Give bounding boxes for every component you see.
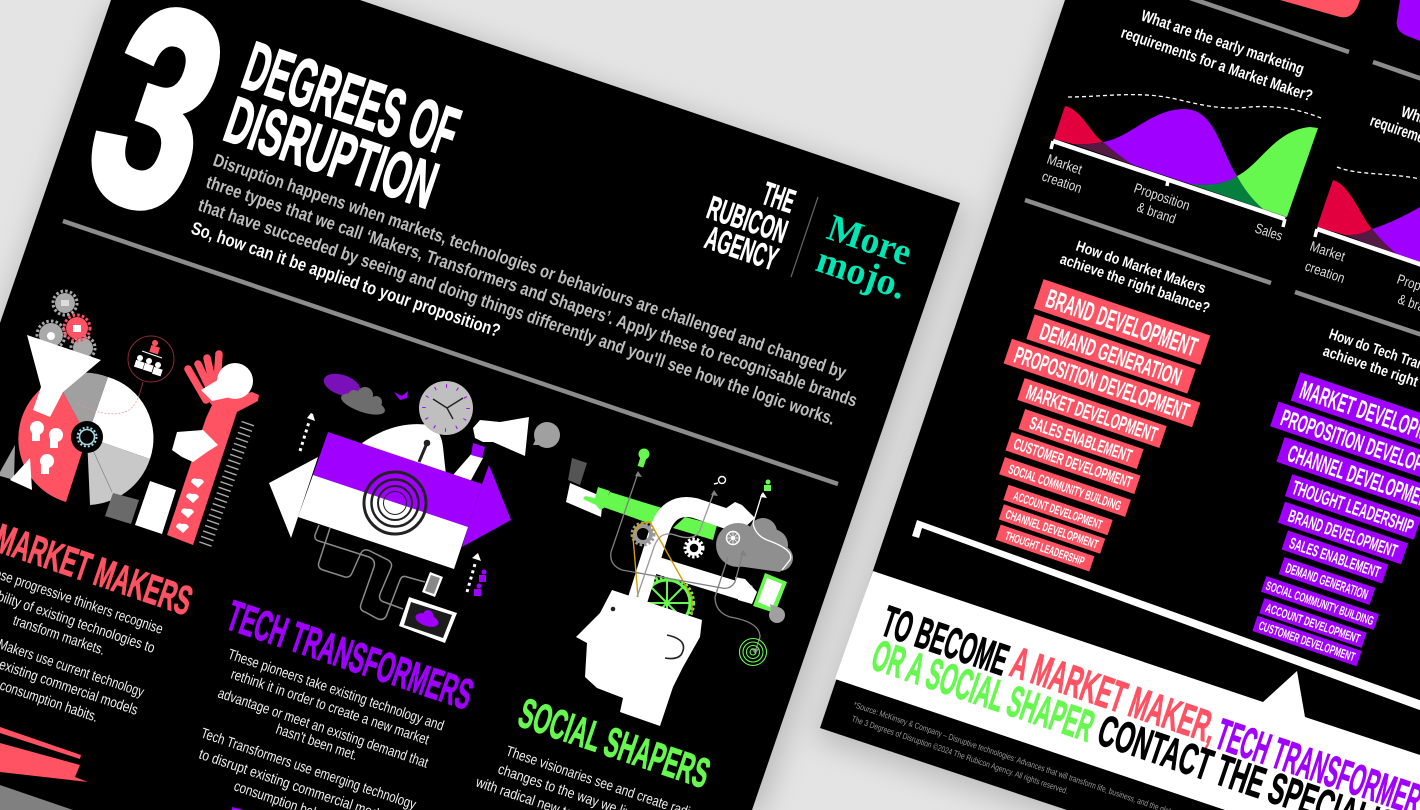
target xyxy=(740,638,766,666)
heading: market makers balance: achieve the right balance? xyxy=(1058,251,1212,317)
triangles xyxy=(0,445,32,490)
dotted arrows xyxy=(300,413,481,592)
text: tech transformers: rethink it in order to create a new market xyxy=(229,667,431,748)
heading: market makers balance: How do Market Makers xyxy=(1074,238,1208,297)
magnifier xyxy=(714,476,726,484)
eye and ear xyxy=(611,607,684,659)
purple mark at bottom xyxy=(232,807,244,810)
stack: market makers: BRAND DEVELOPMENT xyxy=(1042,283,1202,363)
white arch arm xyxy=(636,507,745,605)
text: market makers xyxy=(0,562,165,726)
stack: market makers: THOUGHT LEADERSHIP xyxy=(1003,529,1086,568)
intro text: Disruption happens when markets, technologies or behaviours are challenged and changed by xyxy=(211,150,849,383)
stack: market makers: CHANNEL DEVELOPMENT xyxy=(1004,507,1100,552)
heading: market maker requirements xyxy=(1119,8,1315,105)
stack: market makers: SALES ENABLEMENT xyxy=(1027,413,1135,466)
second chart labels: Market xyxy=(1308,238,1347,264)
bird xyxy=(394,391,408,400)
green arm xyxy=(583,487,717,540)
stack: market makers: DEMAND GENERATION xyxy=(1036,318,1185,391)
intro text: that have succeeded by seeing and doing things differently and you'll see how the logic works. xyxy=(196,195,838,429)
illustration: social shapers xyxy=(566,448,793,726)
illustration: market makers xyxy=(0,291,259,548)
stack: market makers: ACCOUNT DEVELOPMENT xyxy=(1012,489,1104,532)
connector arrows xyxy=(611,473,791,652)
stack: market makers: SOCIAL COMMUNITY BUILDING xyxy=(1007,461,1123,513)
presenter body xyxy=(362,424,446,480)
slogan: More mojo: More xyxy=(822,207,917,274)
heading: market maker requirements: What are the early marketing xyxy=(1139,8,1306,79)
stack: market makers: CUSTOMER DEVELOPMENT xyxy=(1011,436,1134,492)
second chart labels: creation xyxy=(1303,258,1347,286)
small icons xyxy=(638,448,771,491)
people icons xyxy=(474,570,486,596)
illustration: tech transformers xyxy=(269,369,560,643)
chart labels: Sales xyxy=(1253,220,1285,244)
panel: main infographic page xyxy=(0,0,960,810)
phone xyxy=(422,572,443,597)
belt xyxy=(633,522,692,615)
stack: market makers xyxy=(996,279,1210,571)
white lower arm xyxy=(656,565,750,594)
text: tech transformers: advantage or meet an existing demand that xyxy=(216,686,430,772)
top shapes xyxy=(1280,0,1420,41)
cloud grey xyxy=(339,387,387,419)
baseline bracket xyxy=(912,520,1420,712)
purple arrow xyxy=(462,465,511,547)
dark tab xyxy=(568,458,587,485)
white hand top xyxy=(722,502,755,530)
chart labels: & brand xyxy=(1135,199,1178,227)
divider xyxy=(63,221,838,484)
heading: market maker requirements: requirements for a Market Maker? xyxy=(1119,25,1315,105)
org chart icon xyxy=(128,336,174,396)
gears xyxy=(632,523,740,557)
illustration: bottom left arrows xyxy=(0,727,88,810)
white card xyxy=(566,483,603,517)
arrowheads xyxy=(635,471,767,654)
slogan: More mojo xyxy=(811,207,917,308)
head xyxy=(576,590,702,726)
panel: second page xyxy=(820,0,1420,810)
raised arm with bulb xyxy=(167,354,259,545)
stack: tech transformers: CUSTOMER DEVELOPMENT xyxy=(1257,619,1357,664)
slogan: More mojo: mojo. xyxy=(811,239,912,308)
cloud xyxy=(716,518,793,572)
CTA text: TO BECOME xyxy=(876,597,1015,685)
text: tech transformers: hasn't been met. xyxy=(274,722,359,764)
heading: tech transformers: TECH TRANSFORMERS xyxy=(221,592,479,720)
chart labels xyxy=(1040,151,1285,244)
clock xyxy=(419,381,473,435)
heading: market makers balance xyxy=(1058,238,1212,317)
chart labels: creation xyxy=(1040,168,1084,196)
title: DISRUPTION xyxy=(217,82,447,222)
speech bubble xyxy=(533,422,560,448)
second chart labels xyxy=(1303,238,1420,319)
text: tech transformers xyxy=(197,647,446,810)
pie chart xyxy=(18,373,153,505)
target rings xyxy=(364,472,426,534)
gears xyxy=(37,291,95,360)
title xyxy=(217,27,468,222)
CTA band xyxy=(835,571,1420,810)
logo: The Rubicon Agency: RUBICON xyxy=(703,189,792,250)
text: tech transformers: These pioneers take existing technology and xyxy=(226,647,446,735)
wires xyxy=(315,525,425,619)
cloud hatched xyxy=(321,369,363,401)
chart: market maker curves xyxy=(1051,95,1321,227)
green gear xyxy=(641,577,693,629)
intro text: So, how can it be applied to your proposition? xyxy=(189,218,503,341)
chart: tech transformer curves xyxy=(1315,167,1420,270)
speech bubble xyxy=(769,604,785,623)
chart labels: Proposition xyxy=(1132,180,1192,213)
banner xyxy=(313,432,482,527)
logo divider xyxy=(791,197,818,277)
logo: The Rubicon Agency xyxy=(701,175,800,277)
bar blocks xyxy=(105,481,176,534)
intro text: three types that we call ‘Makers, Transformers and Shapers’. Apply these to recognisable brands xyxy=(204,172,860,411)
dividers xyxy=(1025,0,1420,336)
logo: The Rubicon Agency: THE xyxy=(758,175,800,220)
white hand lower xyxy=(735,577,757,604)
megaphone xyxy=(473,417,529,456)
stack: market makers: PROPOSITION DEVELOPMENT xyxy=(1011,342,1193,426)
ruler ticks xyxy=(204,423,248,548)
stack: tech transformers xyxy=(1252,372,1420,666)
chart labels: Market xyxy=(1045,151,1084,177)
logo: The Rubicon Agency: AGENCY xyxy=(701,219,783,277)
funnel xyxy=(27,335,101,417)
white arrow xyxy=(269,457,318,538)
green phone xyxy=(753,573,787,613)
text: market makers: transform markets. xyxy=(11,613,107,659)
title: DEGREES OF xyxy=(234,27,468,171)
stack: market makers: MARKET DEVELOPMENT xyxy=(1023,381,1160,447)
stack: tech transformers: ACCOUNT DEVELOPMENT xyxy=(1264,601,1362,646)
tablet xyxy=(399,597,457,643)
